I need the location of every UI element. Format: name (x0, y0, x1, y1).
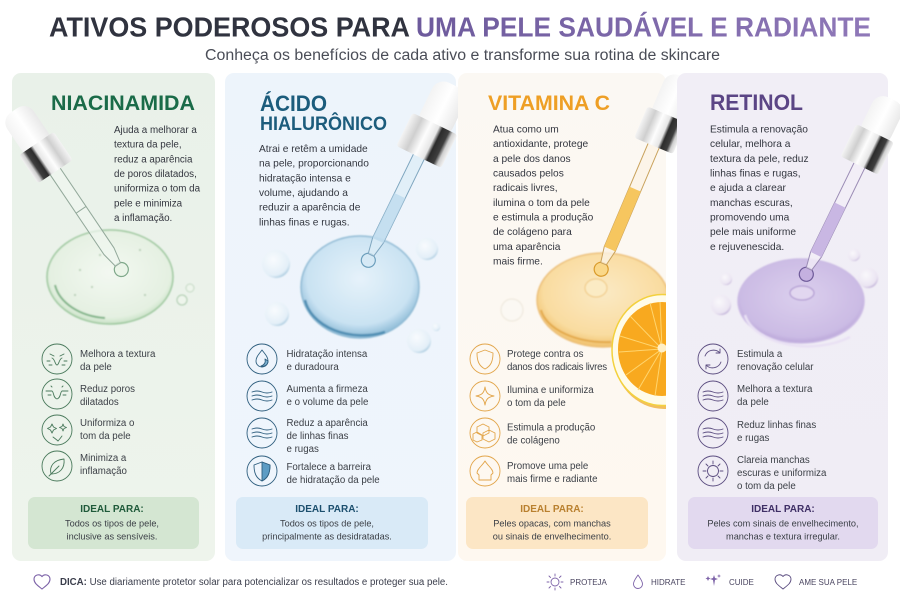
dropper: blue (343, 74, 476, 278)
description: acido hialuronico: volume, ajudando a (259, 188, 348, 199)
description: niacinamida: uniformiza o tom da (114, 184, 201, 195)
benefit: ilumina: Ilumina e uniformiza (507, 385, 594, 396)
description: retinol: Estimula a renovação (710, 124, 808, 136)
icon: orange slice (611, 294, 666, 409)
icon: linhas (247, 418, 277, 448)
benefit: hidratacao: Hidratação intensa (286, 349, 368, 360)
benefit: renovacao: Estimula a (737, 349, 783, 360)
title: UMA PELE SAUDÁVEL E RADIANTE (416, 12, 871, 42)
panel: retinol (677, 73, 900, 561)
description: vitamina c: ilumina o tom da pele (493, 198, 590, 209)
description: vitamina c: mais firme. (493, 256, 543, 267)
tip text: DICA: Use diariamente protetor solar para potencializar os resultados e proteger sua pele. (60, 577, 448, 588)
heading: niacinamida: NIACINAMIDA (51, 91, 195, 115)
benefit: folha: inflamação (80, 466, 127, 477)
description: retinol: promovendo uma (710, 212, 790, 223)
description: retinol: linhas finas e rugas, (710, 168, 801, 179)
description: acido hialuronico: hidratação intensa e (259, 173, 351, 184)
ideal box: niacinamida: IDEAL PARA: (80, 504, 144, 515)
benefit: manchas: o tom da pele (737, 481, 796, 492)
footer badges (547, 574, 857, 590)
heading: acido hialuronico (260, 91, 387, 135)
panel: acido hialuronico (225, 73, 476, 561)
benefit: linhas: de linhas finas (286, 431, 349, 442)
benefit: renovacao: renovação celular (737, 362, 814, 373)
dropper: purple (784, 90, 900, 290)
benefit: hidratacao: e duradoura (286, 362, 339, 373)
ideal box: retinol: IDEAL PARA: (751, 504, 815, 515)
benefit: linhas: Reduz a aparência (286, 418, 368, 429)
benefit: textura: da pele (80, 362, 112, 373)
benefit: linhas: e rugas (286, 444, 319, 455)
description: niacinamida: reduz a aparência (114, 154, 193, 165)
benefit: barreira: Fortalece a barreira (286, 462, 372, 473)
serum drop: purple (711, 249, 878, 346)
subtitle: Conheça os benefícios de cada ativo e transforme sua rotina de skincare (205, 47, 720, 64)
footer tip (34, 575, 448, 589)
description: retinol: celular, melhora a (710, 139, 791, 150)
benefit: ilumina: o tom da pele (507, 398, 566, 409)
icon: sol (698, 456, 728, 486)
title (49, 12, 871, 42)
icon: ame (775, 575, 791, 589)
benefit: colageno: Estimula a produção (507, 422, 595, 434)
icon: textura (42, 344, 72, 374)
label: ame: AME SUA PELE (799, 578, 857, 587)
ideal box: niacinamida: Todos os tipos de pele, (65, 518, 159, 528)
benefit: folha: Minimiza a (80, 453, 127, 464)
icon: linhas roxas (698, 418, 728, 448)
description: vitamina c: radicais livres, (493, 183, 558, 194)
description: niacinamida: textura da pele, (114, 140, 182, 151)
description: vitamina c: e estimula a produção (493, 212, 594, 223)
description: vitamina c: de colágeno para (493, 227, 572, 238)
description: retinol: e ajuda a clarear (710, 183, 786, 194)
ideal box: acido hialuronico: Todos os tipos de pele, (280, 518, 374, 528)
description: vitamina c: uma aparência (493, 242, 561, 253)
ideal box: acido hialuronico (236, 497, 428, 549)
icon: poros (42, 379, 72, 409)
description: acido hialuronico: linhas finas e rugas. (259, 217, 350, 228)
benefit: manchas: escuras e uniformiza (737, 468, 827, 479)
benefit: barreira: de hidratação da pele (286, 475, 380, 486)
icon: uniformiza (42, 415, 72, 445)
dropper: orange (579, 69, 702, 284)
description: niacinamida: Ajuda a melhorar a (114, 125, 197, 136)
icon: escudo laranja (470, 344, 500, 374)
ideal box: niacinamida (28, 497, 199, 549)
heading: vitamina c: VITAMINA C (488, 91, 610, 115)
description: retinol: textura da pele, reduz (710, 154, 809, 165)
benefit: textura: Melhora a textura (80, 349, 156, 360)
benefit: poros: dilatados (80, 397, 119, 408)
icon: firmeza (247, 381, 277, 411)
description: acido hialuronico: Atrai e retêm a umidade (259, 144, 368, 155)
benefit: manchas: Clareia manchas (737, 455, 810, 466)
ideal box: vitamina c (466, 497, 648, 549)
benefit: uniformiza: Uniformiza o (80, 418, 134, 429)
label: cuide: CUIDE (729, 578, 754, 587)
benefit: firmeza: e o volume da pele (286, 397, 368, 408)
description: vitamina c: Atua como um (493, 124, 559, 136)
ideal box: acido hialuronico: principalmente as desidratadas. (262, 532, 392, 542)
ideal box: retinol: manchas e textura irregular. (726, 532, 840, 542)
dropper: green (0, 99, 143, 287)
benefit: poros: Reduz poros (80, 384, 135, 395)
description: acido hialuronico: na pele, proporcionando (259, 159, 369, 170)
benefit: radicais: danos dos radicais livres (507, 362, 607, 373)
icon: renovacao (698, 344, 728, 374)
ideal box: vitamina c: IDEAL PARA: (520, 504, 584, 515)
icon: escudo (247, 456, 277, 486)
ideal box: acido hialuronico: IDEAL PARA: (295, 504, 359, 515)
benefit: firme: Promove uma pele (507, 461, 588, 472)
label: hidrate: HIDRATE (651, 578, 686, 587)
title: ATIVOS PODEROSOS PARA (49, 12, 410, 42)
benefit: uniformiza: tom da pele (80, 431, 131, 442)
heading: acido hialuronico: HIALURÔNICO (260, 111, 387, 135)
icon: textura roxa (698, 381, 728, 411)
benefit: linhas roxas: Reduz linhas finas (737, 420, 816, 431)
icon: hidrate (634, 575, 642, 589)
icon: colageno (470, 418, 500, 448)
icon: proteja (547, 574, 563, 590)
icon: brilho (470, 381, 500, 411)
serum drop: green (47, 230, 194, 324)
ideal box: niacinamida: inclusive as sensíveis. (67, 532, 157, 542)
benefit: radicais: Protege contra os (507, 349, 584, 360)
benefit: textura roxa: Melhora a textura (737, 384, 813, 395)
description: retinol: pele mais uniforme (710, 227, 796, 238)
description: niacinamida: a inflamação. (114, 213, 172, 224)
ideal box: retinol: Peles com sinais de envelhecimento, (707, 518, 859, 528)
icon: folha (42, 451, 72, 481)
description: niacinamida: pele e minimiza (114, 198, 183, 209)
description: retinol: e rejuvenescida. (710, 242, 784, 253)
description: retinol: manchas escuras, (710, 198, 793, 209)
benefit: firmeza: Aumenta a firmeza (286, 384, 368, 395)
serum drop: blue (262, 236, 440, 353)
ideal box: vitamina c: Peles opacas, com manchas (493, 518, 611, 528)
icon: heart (34, 575, 50, 589)
benefit: textura roxa: da pele (737, 397, 769, 408)
benefit: colageno: de colágeno (507, 436, 560, 446)
description: vitamina c: causados pelos (493, 168, 564, 179)
icon: cuide (706, 574, 721, 586)
icon: pele firme (470, 456, 500, 486)
heading: acido hialuronico: ÁCIDO (260, 91, 327, 116)
description: vitamina c: a pele dos danos (493, 154, 571, 165)
description: acido hialuronico: reduzir a aparência de (259, 203, 361, 214)
benefit: firme: mais firme e radiante (507, 474, 597, 485)
panel: vitamina c (458, 73, 677, 561)
label: proteja: PROTEJA (570, 578, 608, 587)
description: vitamina c: antioxidante, protege (493, 139, 588, 150)
serum drop: orange (501, 253, 669, 347)
ideal box: retinol (688, 497, 878, 549)
ideal box: vitamina c: ou sinais de envelhecimento. (493, 532, 611, 542)
panel: niacinamida (0, 73, 215, 561)
benefit: linhas roxas: e rugas (737, 433, 769, 444)
icon: gota (247, 344, 277, 374)
heading: retinol: RETINOL (710, 90, 803, 115)
description: niacinamida: de poros dilatados, (114, 169, 197, 180)
